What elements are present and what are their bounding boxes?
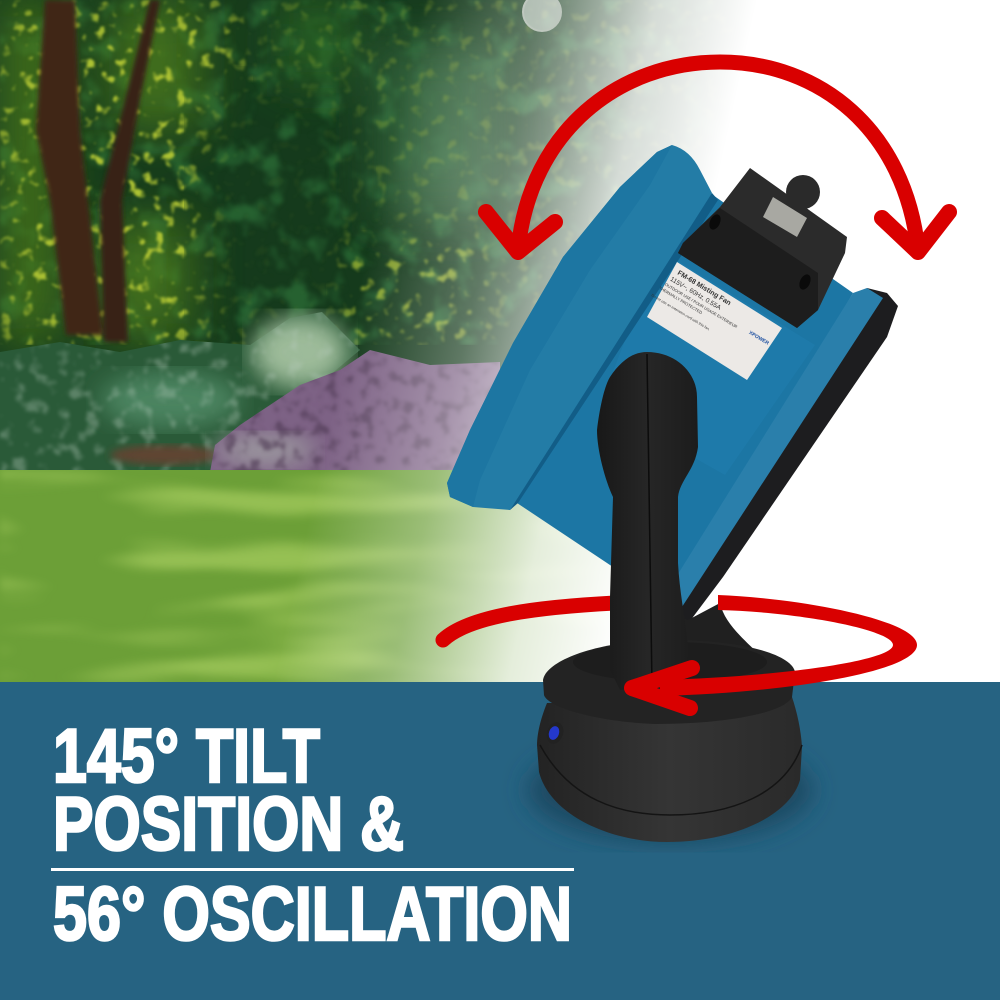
knob	[786, 175, 820, 209]
foliage	[0, 0, 668, 352]
arrow: top tilt arc	[486, 62, 949, 252]
specification label: OUTDOOR USE / POUR USAGE EXTERIEUR	[664, 282, 738, 329]
specification label: Do not use an extension cord with this fan.	[651, 293, 711, 332]
bell dark seam	[510, 193, 718, 510]
arrow: oscillation front arc	[632, 595, 917, 708]
heading line 2: POSITION &	[53, 782, 404, 867]
heading text	[53, 714, 572, 957]
heading line 1: 145° TILT	[53, 714, 320, 799]
arm grip	[597, 352, 698, 690]
stand foot	[670, 603, 770, 690]
white fade overlay	[0, 0, 1000, 690]
bubble	[523, 0, 561, 31]
bell outer strip	[447, 145, 672, 507]
specification label: XPOWER	[748, 330, 770, 347]
lawn	[0, 470, 760, 685]
base platter	[543, 640, 795, 724]
switch box	[678, 168, 847, 328]
specification label: THERMALLY PROTECTED	[658, 285, 703, 315]
background photo: garden	[0, 0, 738, 682]
divider rule	[51, 868, 574, 871]
bottom panel	[0, 682, 1000, 1000]
specification label: 115V~, 60Hz, 0.55A	[669, 276, 723, 312]
body recessed panel	[600, 250, 815, 475]
specification label: FM-68 Misting Fan	[676, 270, 732, 307]
arrow: oscillation rear arc	[443, 603, 615, 640]
tree trunks	[36, 0, 160, 342]
fan front bell	[447, 145, 712, 510]
rocker switch	[763, 197, 807, 237]
hedge: purple plants	[205, 350, 500, 470]
fan body	[510, 193, 853, 612]
blue button	[544, 720, 566, 746]
product: fan	[447, 145, 898, 842]
screws	[707, 213, 723, 231]
heading line 3: 56° OSCILLATION	[53, 872, 572, 957]
specification label	[647, 262, 782, 380]
fan rear flange	[668, 288, 883, 610]
base lower housing	[537, 697, 802, 842]
hedge: green plants	[0, 308, 360, 470]
fan back rim	[675, 288, 898, 625]
arm seam	[647, 354, 652, 685]
base shadow	[528, 738, 812, 842]
